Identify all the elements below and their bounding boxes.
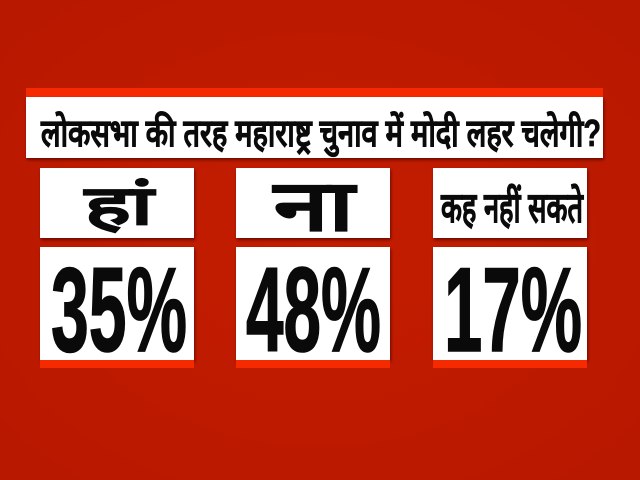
label card: yes <box>40 168 194 238</box>
value card: 35%: 35% <box>51 243 187 377</box>
column: yes <box>40 168 194 377</box>
label card: no <box>236 167 390 245</box>
column: can't say <box>433 168 587 377</box>
title banner <box>26 88 603 158</box>
column: no <box>236 167 390 377</box>
value card: 48% <box>236 243 390 377</box>
value card: 48%: 48% <box>246 243 381 377</box>
label card: no: ना <box>271 167 358 245</box>
banner white panel <box>26 97 603 158</box>
label card: yes: हां <box>83 176 156 236</box>
value card: 35% <box>40 243 194 377</box>
label card: can't say <box>433 168 587 238</box>
banner red strip <box>26 88 603 97</box>
value card: 17% <box>433 243 587 377</box>
